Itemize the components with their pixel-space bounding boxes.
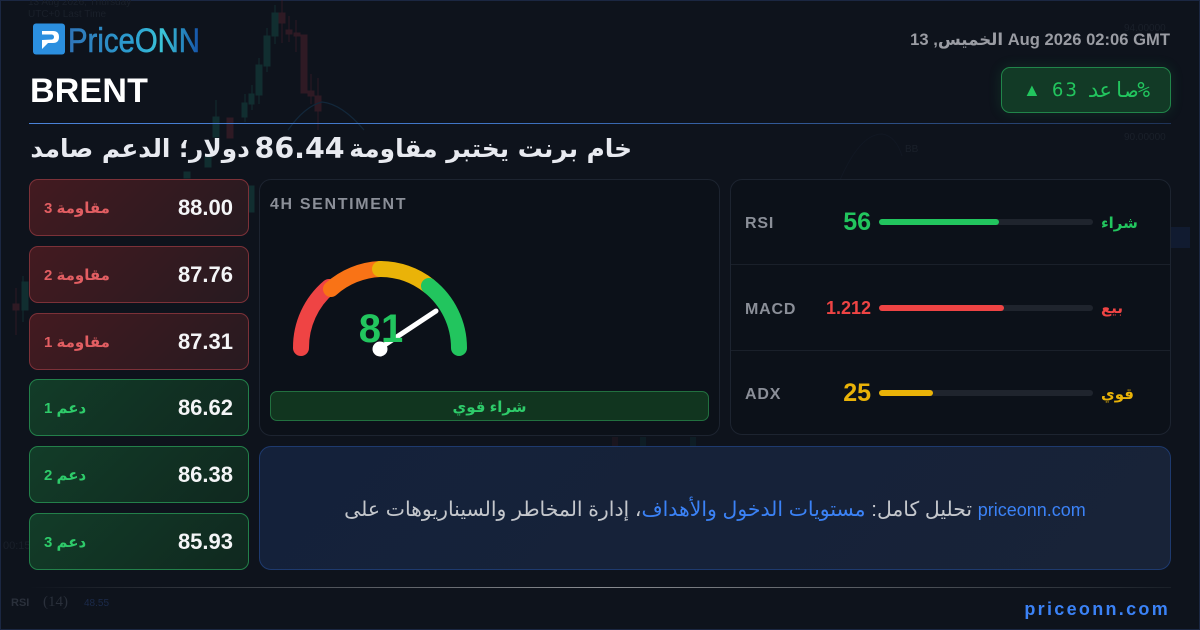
- background chart: 90.00000: [1124, 132, 1166, 143]
- date: الخميس, 13 Aug 2026 02:06 GMT: [910, 30, 1170, 49]
- headline: خام برنت يختبر مقاومة 86.44 دولار؛ الدعم صامد: [30, 132, 632, 165]
- level: support 2: دعم 2: [44, 467, 86, 484]
- panel: promo: تحليل كامل: مستويات الدخول والأهداف، إدارة المخاطر والسيناريوهات على priceonn.com: [344, 499, 1086, 521]
- row dividers: [731, 264, 1170, 265]
- level: resistance 3: [29, 179, 249, 236]
- strength pill: [270, 391, 709, 421]
- symbol title: BRENT: [30, 72, 148, 110]
- indicator: ADX: قوي: [1101, 386, 1134, 403]
- level: support 3: 85.93: [178, 529, 233, 554]
- indicator: RSI: [745, 208, 1138, 236]
- level: support 1: دعم 1: [44, 400, 86, 417]
- indicator: ADX: [745, 379, 1134, 407]
- level: support 2: 86.38: [178, 462, 233, 487]
- indicator: MACD: [745, 298, 1123, 318]
- footer url: priceonn.com: [1024, 599, 1170, 619]
- indicator: RSI: شراء: [1101, 215, 1138, 232]
- level: support 1: 86.62: [178, 395, 233, 420]
- indicator: MACD: بيع: [1101, 300, 1123, 317]
- trend badge: 63: [1052, 79, 1079, 101]
- gauge: 81: [359, 307, 403, 351]
- footer divider: [29, 587, 1171, 588]
- level: resistance 3: 88.00: [178, 195, 233, 220]
- gauge: [293, 261, 467, 356]
- level: resistance 2: 87.76: [178, 262, 233, 287]
- level: resistance 2: [29, 246, 249, 303]
- level: support 1: [29, 379, 249, 436]
- panel: indicators: [730, 179, 1171, 435]
- background chart: 92.00000: [1124, 77, 1166, 88]
- level: support 3: دعم 3: [44, 534, 86, 551]
- indicator: RSI: 56: [843, 208, 871, 236]
- level: support 3: [29, 513, 249, 570]
- background chart: UTC+0 Last Time: [28, 9, 107, 20]
- level: resistance 2: مقاومة 2: [44, 267, 110, 284]
- indicator: MACD: 1.212: [826, 298, 871, 318]
- level: resistance 1: 87.31: [178, 329, 233, 354]
- indicator: RSI: RSI: [745, 215, 774, 232]
- level: resistance 1: مقاومة 1: [44, 334, 110, 351]
- trend badge: ▲: [1023, 80, 1041, 100]
- strength pill: شراء قوي: [452, 399, 527, 416]
- indicator: MACD: MACD: [745, 301, 796, 318]
- background chart: (14): [43, 594, 68, 610]
- background chart: BB: [905, 144, 919, 155]
- trend badge: [1001, 67, 1171, 113]
- level: resistance 1: [29, 313, 249, 370]
- panel: sentiment: [259, 179, 720, 436]
- background chart: 48.55: [84, 598, 109, 609]
- header divider: [29, 123, 1171, 124]
- trend badge: %صاعد: [1087, 78, 1150, 102]
- background chart: 00:15: [3, 540, 31, 552]
- indicator: ADX: ADX: [745, 386, 781, 403]
- indicator: ADX: 25: [843, 379, 871, 407]
- background chart: 94.00000: [1124, 23, 1166, 34]
- background chart: RSI: [11, 597, 29, 609]
- sentiment heading: 4H SENTIMENT: [270, 196, 407, 213]
- level: support 2: [29, 446, 249, 503]
- panel: promo: [259, 446, 1171, 570]
- level: resistance 3: مقاومة 3: [44, 200, 110, 217]
